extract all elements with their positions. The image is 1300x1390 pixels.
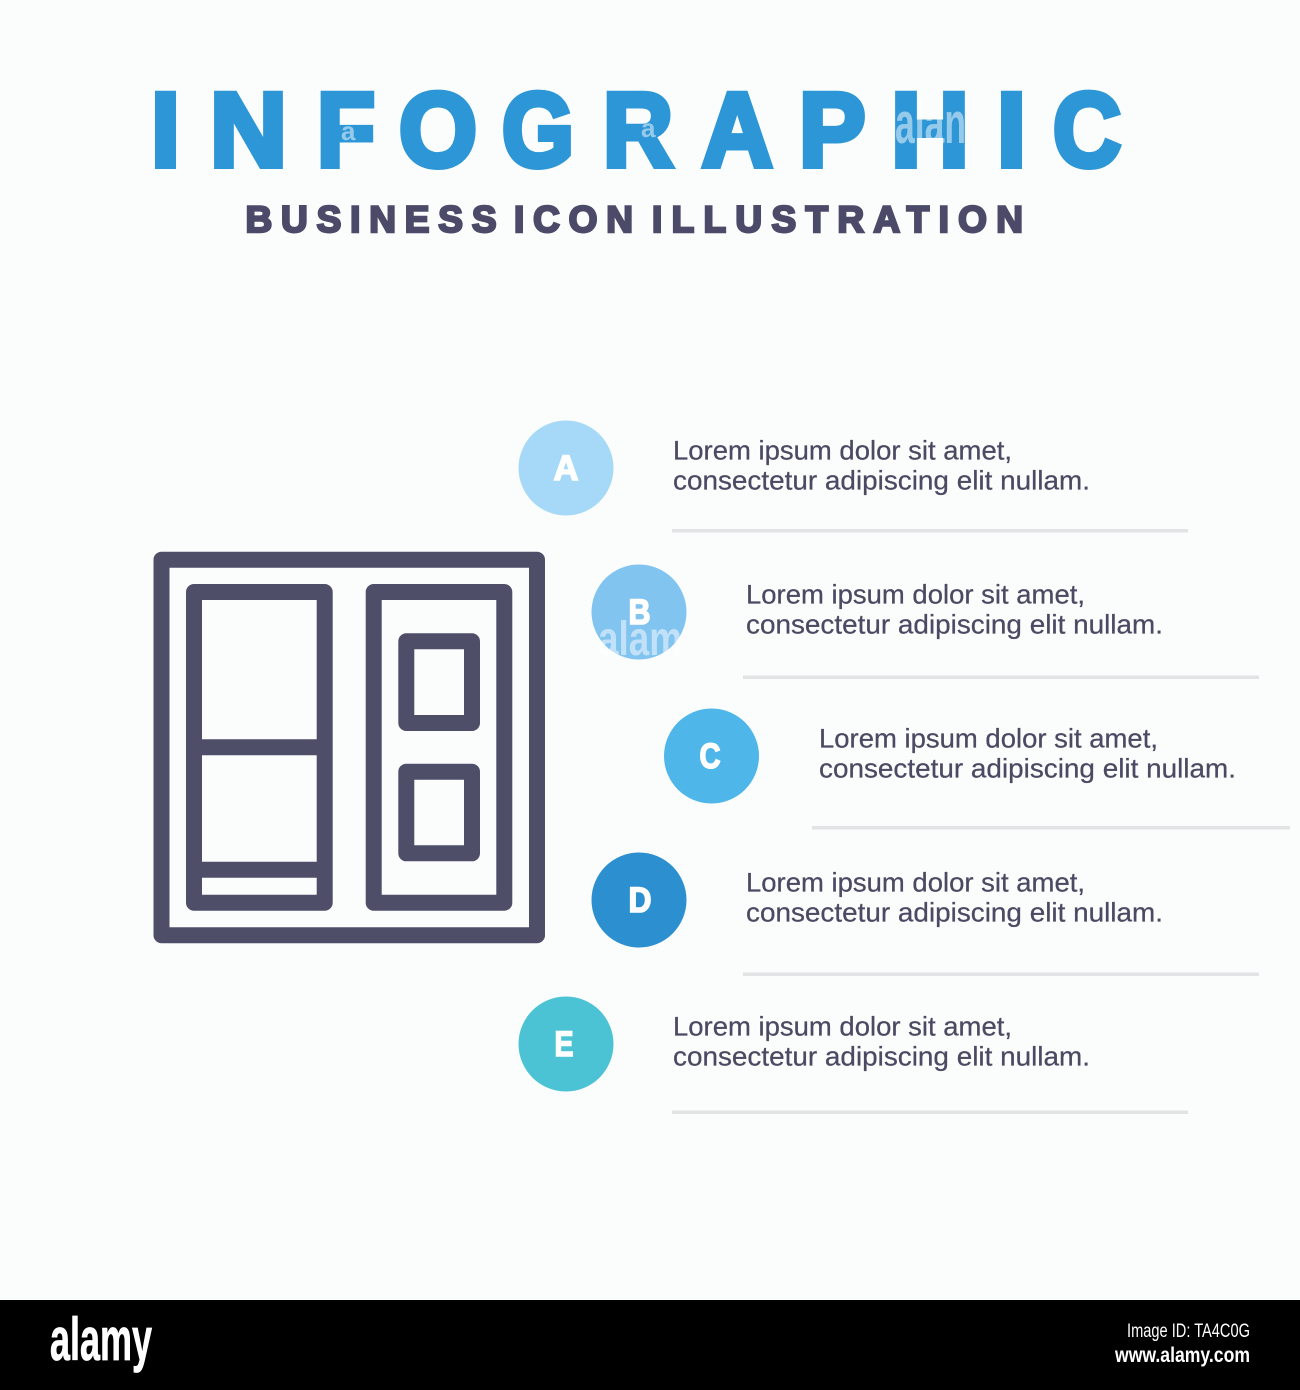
subtitle: ICON	[514, 199, 633, 240]
text C: consectetur adipiscing elit nullam.	[819, 754, 1236, 784]
step E	[518, 996, 1188, 1114]
title: N	[210, 72, 287, 189]
step A	[518, 420, 1188, 532]
site url: www.alamy.com	[1114, 1344, 1250, 1367]
badge C: C	[700, 737, 720, 776]
title watermark: alan	[895, 91, 966, 156]
step C	[664, 708, 1290, 830]
title: I	[997, 72, 1026, 189]
badge B watermark: alam	[598, 613, 682, 666]
title: R	[603, 72, 673, 189]
step D	[592, 852, 1259, 976]
icon: window layout	[162, 560, 537, 935]
text A: Lorem ipsum dolor sit amet,	[673, 436, 1012, 466]
text D	[746, 868, 1163, 928]
step B	[592, 564, 1259, 679]
badge B: B	[628, 593, 650, 632]
badge B	[592, 564, 686, 660]
badge D: D	[628, 881, 652, 920]
title: H	[891, 72, 969, 189]
title	[151, 72, 1121, 189]
badge E: E	[554, 1025, 574, 1064]
subtitle	[246, 199, 1023, 240]
subtitle: ILLUSTRATION	[652, 199, 1023, 240]
subtitle: BUSINESS	[246, 199, 496, 240]
text E: consectetur adipiscing elit nullam.	[673, 1042, 1090, 1072]
text A: consectetur adipiscing elit nullam.	[673, 466, 1090, 496]
footer logo: alamy	[50, 1306, 152, 1373]
title: G	[502, 72, 574, 189]
badge E	[518, 996, 614, 1092]
badge A: A	[554, 449, 578, 488]
text A	[673, 436, 1090, 496]
text B	[746, 580, 1163, 640]
title: P	[799, 72, 866, 189]
title: O	[399, 72, 477, 189]
text B: consectetur adipiscing elit nullam.	[746, 610, 1163, 640]
title: C	[1053, 72, 1121, 189]
image id: Image ID: TA4C0G	[1127, 1321, 1250, 1342]
text E: Lorem ipsum dolor sit amet,	[673, 1012, 1012, 1042]
text D: Lorem ipsum dolor sit amet,	[746, 868, 1085, 898]
title: F	[317, 72, 375, 189]
text C	[819, 724, 1236, 784]
footer bar	[0, 1300, 1300, 1390]
badge C	[664, 708, 759, 804]
title: I	[151, 72, 180, 189]
title watermark	[341, 91, 966, 156]
text C: Lorem ipsum dolor sit amet,	[819, 724, 1158, 754]
text E	[673, 1012, 1090, 1072]
badge A	[518, 420, 614, 516]
title watermark: a	[341, 116, 356, 146]
text D: consectetur adipiscing elit nullam.	[746, 898, 1163, 928]
title watermark: a	[641, 113, 656, 143]
title: A	[702, 72, 772, 189]
text B: Lorem ipsum dolor sit amet,	[746, 580, 1085, 610]
badge D	[592, 852, 686, 948]
